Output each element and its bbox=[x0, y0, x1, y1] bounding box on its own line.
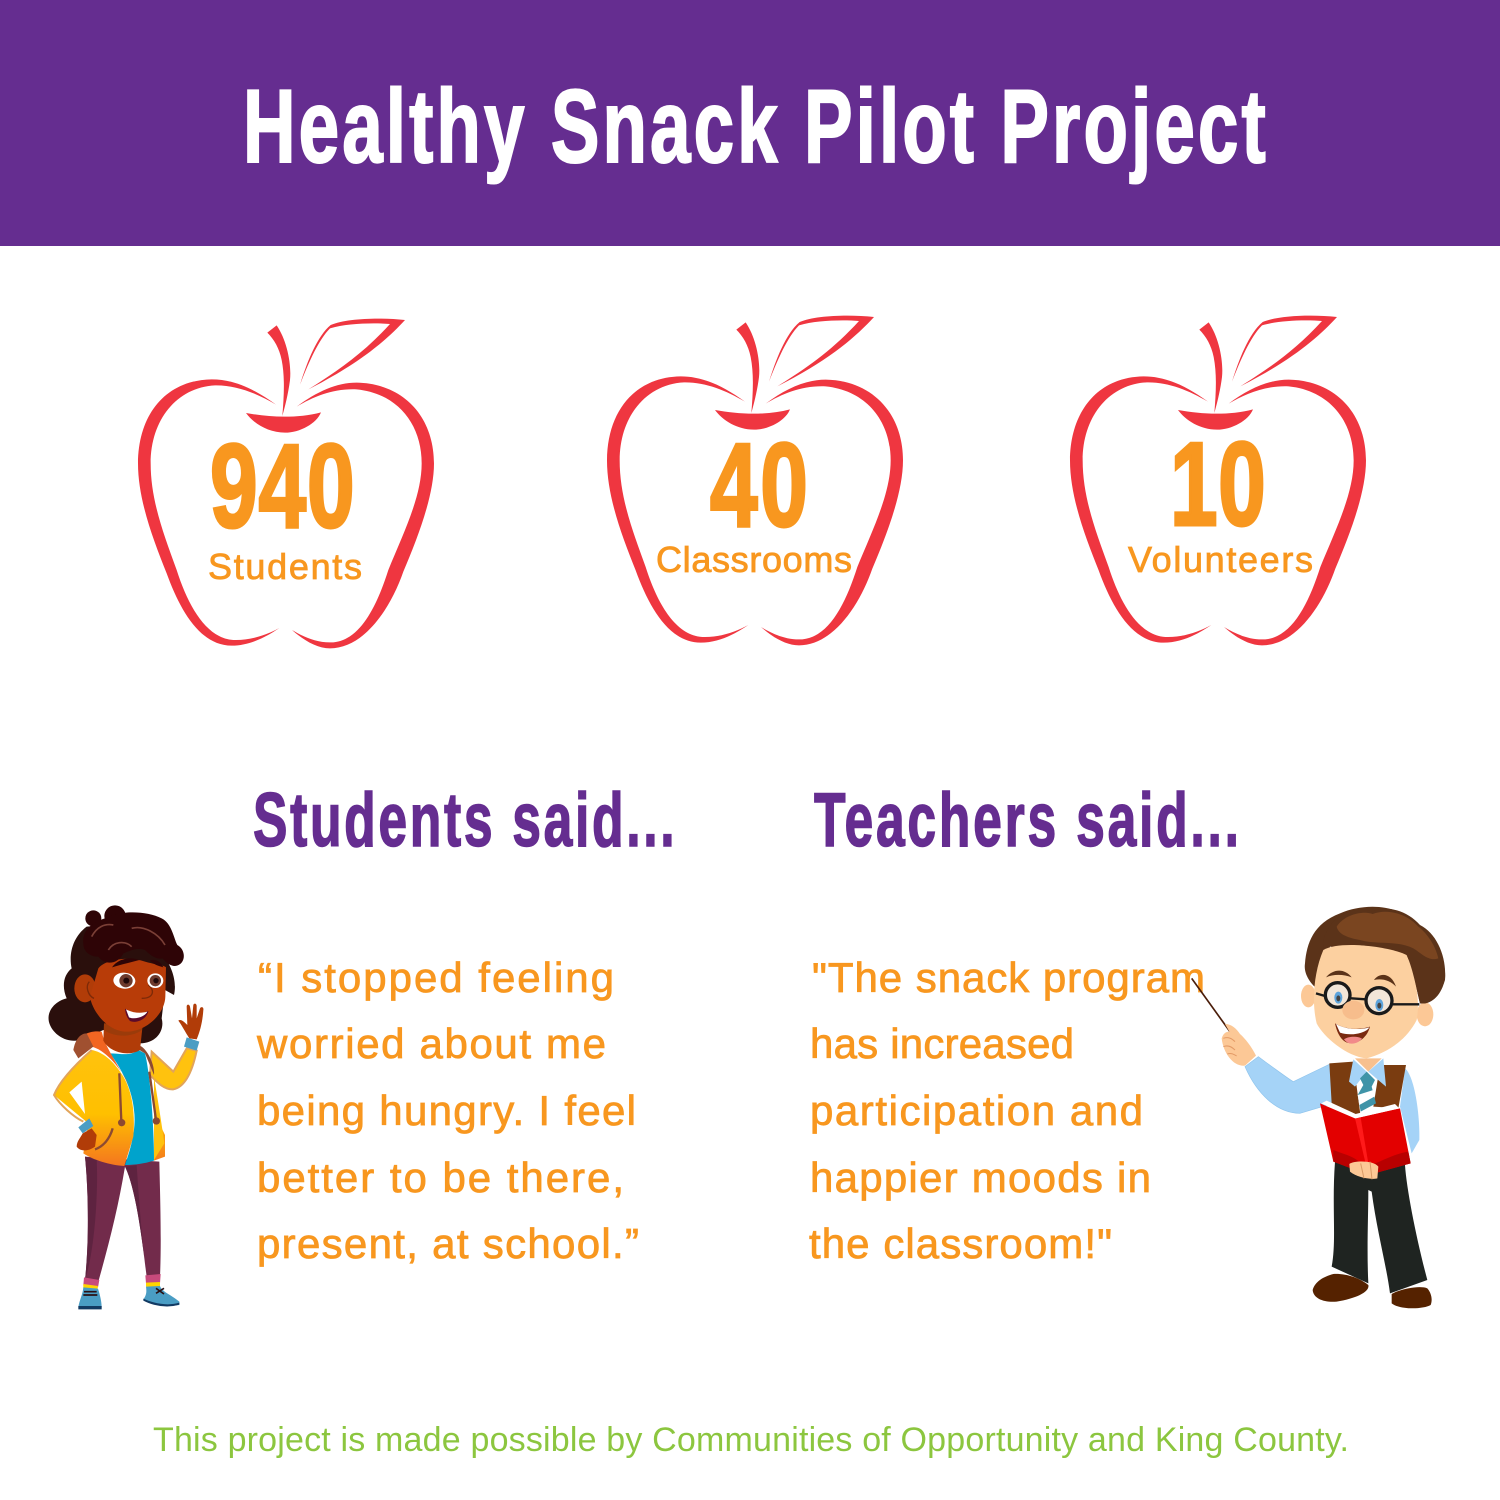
number 40: 40 bbox=[710, 418, 808, 551]
student quote: worried about me bbox=[256, 1020, 606, 1067]
teacher quote: participation and bbox=[810, 1087, 1143, 1134]
illustration: student girl bbox=[49, 905, 203, 1309]
icon: apple outline bbox=[138, 319, 434, 648]
illustration: teacher bbox=[1192, 907, 1445, 1308]
teacher quote: "The snack program bbox=[812, 954, 1205, 1001]
student quote bbox=[256, 954, 639, 1267]
number 10: 10 bbox=[1170, 417, 1266, 550]
student quote: present, at school.” bbox=[257, 1220, 639, 1267]
stat: 940 students bbox=[138, 319, 434, 648]
student quote: “I stopped feeling bbox=[258, 954, 614, 1001]
teacher quote: the classroom!" bbox=[809, 1220, 1112, 1267]
student quote: being hungry. I feel bbox=[257, 1087, 636, 1134]
title: Healthy Snack Pilot Project bbox=[243, 69, 1266, 185]
teacher quote: happier moods in bbox=[810, 1154, 1151, 1201]
icon: pointer bbox=[1192, 978, 1231, 1033]
label Classrooms: Classrooms bbox=[656, 539, 852, 580]
label Students: Students bbox=[208, 546, 362, 587]
stat: 40 classrooms bbox=[607, 316, 903, 645]
header band bbox=[0, 0, 1500, 246]
footer credit: This project is made possible by Communities of Opportunity and King County. bbox=[153, 1421, 1349, 1459]
teacher quote bbox=[809, 954, 1205, 1267]
icon: apple outline bbox=[1070, 316, 1366, 645]
heading: students said: Students said... bbox=[253, 777, 675, 862]
teacher quote: has increased bbox=[810, 1020, 1074, 1067]
heading: teachers said: Teachers said... bbox=[814, 777, 1239, 862]
label Volunteers: Volunteers bbox=[1128, 539, 1313, 580]
icon: apple outline bbox=[607, 316, 903, 645]
student quote: better to be there, bbox=[257, 1154, 624, 1201]
number 940: 940 bbox=[210, 419, 355, 552]
stat: 10 volunteers bbox=[1070, 316, 1366, 645]
